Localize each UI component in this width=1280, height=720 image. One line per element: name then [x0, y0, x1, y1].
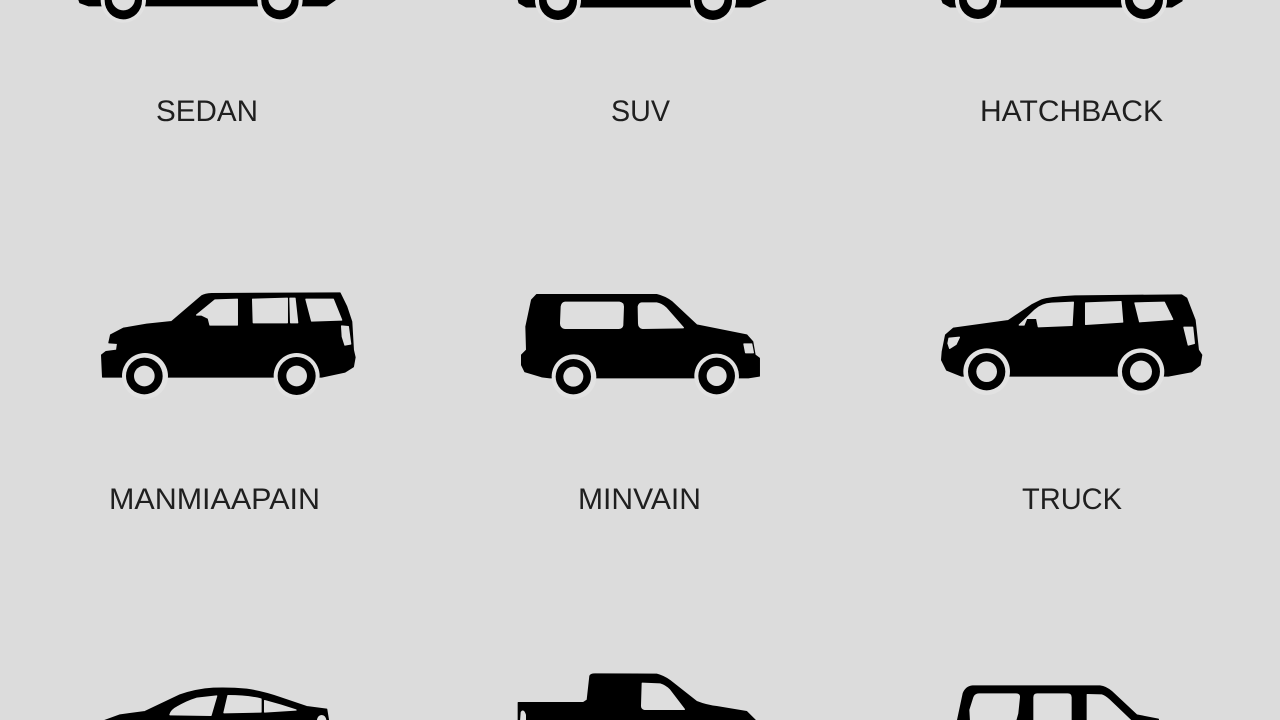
icon: hatchback silhouette (top row, cropped): [940, 0, 1183, 23]
label: SUV: SUV: [611, 95, 670, 128]
icon: sedan silhouette (top row, cropped): [77, 0, 335, 23]
icon: pickup truck silhouette (bottom row, cropped): [518, 674, 757, 720]
icon: SUV silhouette (top row, cropped): [517, 0, 766, 23]
label: TRUCK: TRUCK: [1022, 483, 1122, 516]
icon: sedan silhouette (bottom row, cropped): [102, 688, 329, 720]
label: MINVAIN: MINVAIN: [578, 483, 701, 516]
icon: large SUV silhouette, facing left (middle row): [942, 295, 1202, 395]
label: HATCHBACK: HATCHBACK: [980, 95, 1163, 128]
label: SEDAN: SEDAN: [156, 95, 258, 128]
icon: SUV silhouette, facing left (middle row): [102, 293, 355, 399]
label: MANMIAAPAIN: MANMIAAPAIN: [109, 483, 320, 516]
icon: van silhouette (bottom row, cropped): [957, 686, 1158, 720]
icon: minivan silhouette, facing right (middle row): [522, 295, 759, 399]
